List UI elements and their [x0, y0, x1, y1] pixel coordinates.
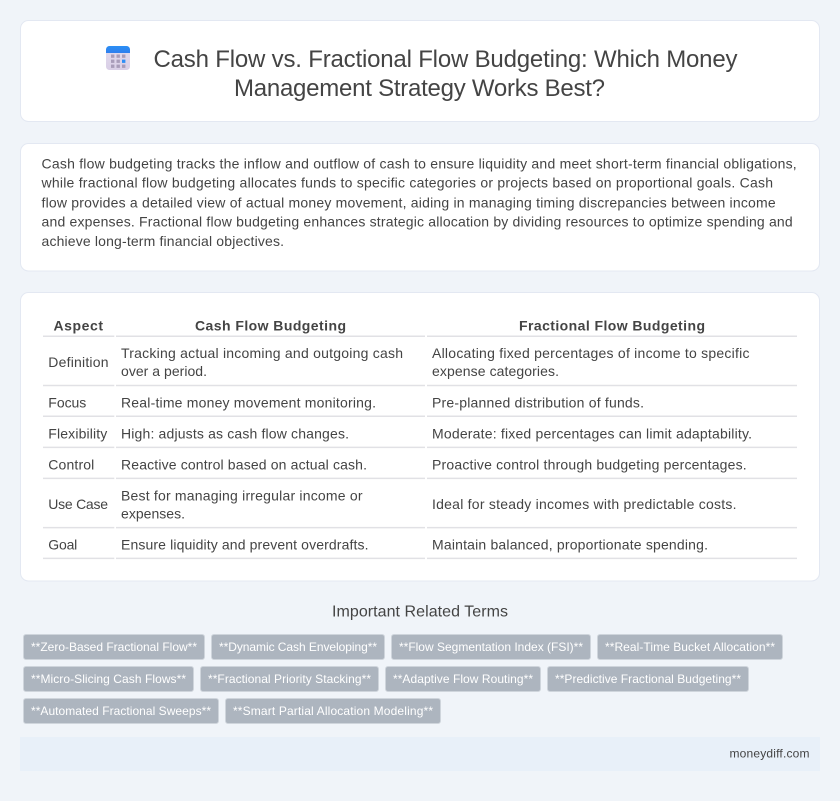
table row: definition: Tracking actual incoming and outgoing cash: [121, 345, 403, 361]
text block: summary paragraph: and expenses. Fractional flow budgeting enhances strategic allocation by dividing resources to optimize spending and: [42, 214, 793, 230]
table row: goal: Maintain balanced, proportionate spending.: [432, 536, 708, 552]
tag: **Real-Time Bucket Allocation**: [605, 640, 775, 654]
footer bar: [20, 737, 820, 771]
tag: [598, 634, 782, 660]
text block: summary paragraph: [40, 155, 797, 249]
table row: focus: [43, 394, 797, 416]
table row: flexibility: [43, 425, 797, 447]
table row: definition: over a period.: [121, 363, 207, 379]
tag: **Automated Fractional Sweeps**: [31, 704, 211, 718]
table row: control: Reactive control based on actual cash.: [121, 456, 367, 472]
table row: use case: [43, 487, 797, 528]
table row: flexibility: Moderate: fixed percentages can limit adaptability.: [432, 425, 752, 441]
table row: definition: expense categories.: [432, 363, 559, 379]
text block: summary paragraph: flow provides a detailed view of actual money movement, aiding in managing timing discrepancies between income: [42, 194, 776, 210]
table row: use case: Use Case: [48, 496, 108, 512]
panel: header: [20, 20, 820, 122]
table row: definition: [43, 345, 797, 386]
table row: focus: Focus: [48, 394, 86, 410]
table row: goal: Goal: [48, 536, 77, 552]
table row: control: Control: [48, 456, 94, 472]
title: [154, 46, 738, 102]
table row: control: Proactive control through budgeting percentages.: [432, 456, 747, 472]
table row: flexibility: High: adjusts as cash flow changes.: [121, 425, 349, 441]
tag: **Zero-Based Fractional Flow**: [31, 640, 197, 654]
table header row: Cash Flow Budgeting: [195, 318, 346, 334]
table row: use case: Ideal for steady incomes with predictable costs.: [432, 496, 736, 512]
table row: control: [43, 456, 797, 478]
footer source: moneydiff.com: [730, 747, 810, 761]
icon: calendar: [106, 46, 130, 70]
tag: [548, 666, 748, 692]
table row: flexibility: Flexibility: [48, 425, 107, 441]
table header row: Aspect: [54, 318, 103, 334]
table row: use case: expenses.: [121, 505, 185, 521]
tag: [24, 698, 218, 724]
tag: [386, 666, 540, 692]
table row: definition: Allocating fixed percentages of income to specific: [432, 345, 750, 361]
tag: **Adaptive Flow Routing**: [393, 672, 533, 686]
table row: focus: Real-time money movement monitoring.: [121, 394, 376, 410]
tag: [200, 666, 378, 692]
tag: **Smart Partial Allocation Modeling**: [233, 704, 433, 718]
table row: definition: Definition: [48, 354, 108, 370]
tag: [24, 634, 204, 660]
panel: summary: [20, 144, 820, 271]
text block: summary paragraph: while fractional flow budgeting allocates funds to specific categories or projects based on proportional goals. Cash: [40, 174, 773, 190]
table header row: Fractional Flow Budgeting: [519, 318, 705, 334]
tag: **Fractional Priority Stacking**: [208, 672, 371, 686]
tag: [24, 666, 194, 692]
table row: use case: Best for managing irregular income or: [121, 487, 363, 503]
title: Cash Flow vs. Fractional Flow Budgeting: Which Money: [154, 46, 738, 73]
tag list: related terms: [24, 634, 782, 724]
tag: [392, 634, 590, 660]
table row: goal: Ensure liquidity and prevent overdrafts.: [121, 536, 368, 552]
text block: summary paragraph: Cash flow budgeting tracks the inflow and outflow of cash to ensure liquidity and meet short-term financial obligations,: [42, 155, 797, 171]
tag: **Predictive Fractional Budgeting**: [555, 672, 741, 686]
heading: related terms: Important Related Terms: [332, 604, 508, 621]
tag: **Dynamic Cash Enveloping**: [219, 640, 377, 654]
title: Management Strategy Works Best?: [234, 75, 605, 102]
table row: goal: [43, 536, 797, 558]
table row: focus: Pre-planned distribution of funds.: [432, 394, 644, 410]
tag: [212, 634, 384, 660]
tag: **Flow Segmentation Index (FSI)**: [399, 640, 583, 654]
tag: **Micro-Slicing Cash Flows**: [31, 672, 186, 686]
tag: [226, 698, 440, 724]
panel: comparison table: [20, 292, 820, 581]
text block: summary paragraph: achieve long-term financial objectives.: [42, 233, 284, 249]
table header row: [43, 318, 797, 336]
